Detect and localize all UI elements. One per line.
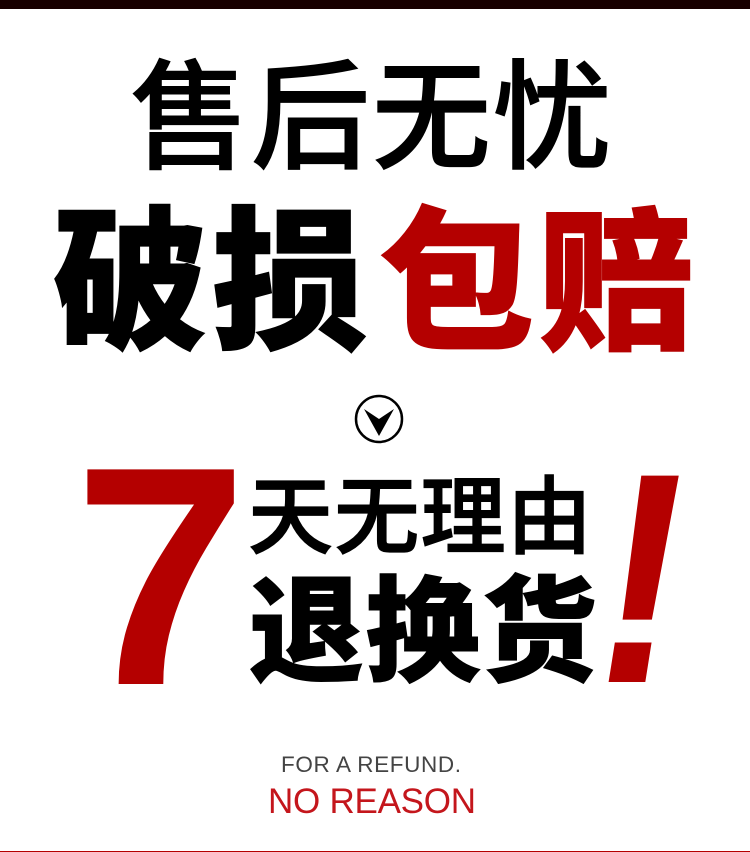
text: returns and exchanges: 退换货 bbox=[249, 569, 597, 697]
top dark bar bbox=[0, 0, 750, 9]
headline black part: 破损 bbox=[53, 197, 367, 370]
text: seven days no reason: 天无理由 bbox=[248, 471, 592, 566]
icon: circled down arrow bbox=[356, 396, 402, 442]
big red numeral 7: 7 bbox=[74, 403, 248, 751]
english caption: for a refund: FOR A REFUND. bbox=[281, 752, 461, 777]
bottom red line bbox=[0, 851, 750, 852]
headline: damage compensated bbox=[53, 197, 695, 370]
headline red part: 包赔 bbox=[379, 197, 695, 370]
red exclamation mark: ! bbox=[574, 412, 714, 747]
title: after-sales worry free: 售后无忧 bbox=[130, 52, 612, 185]
english caption: no reason: NO REASON bbox=[268, 782, 476, 821]
